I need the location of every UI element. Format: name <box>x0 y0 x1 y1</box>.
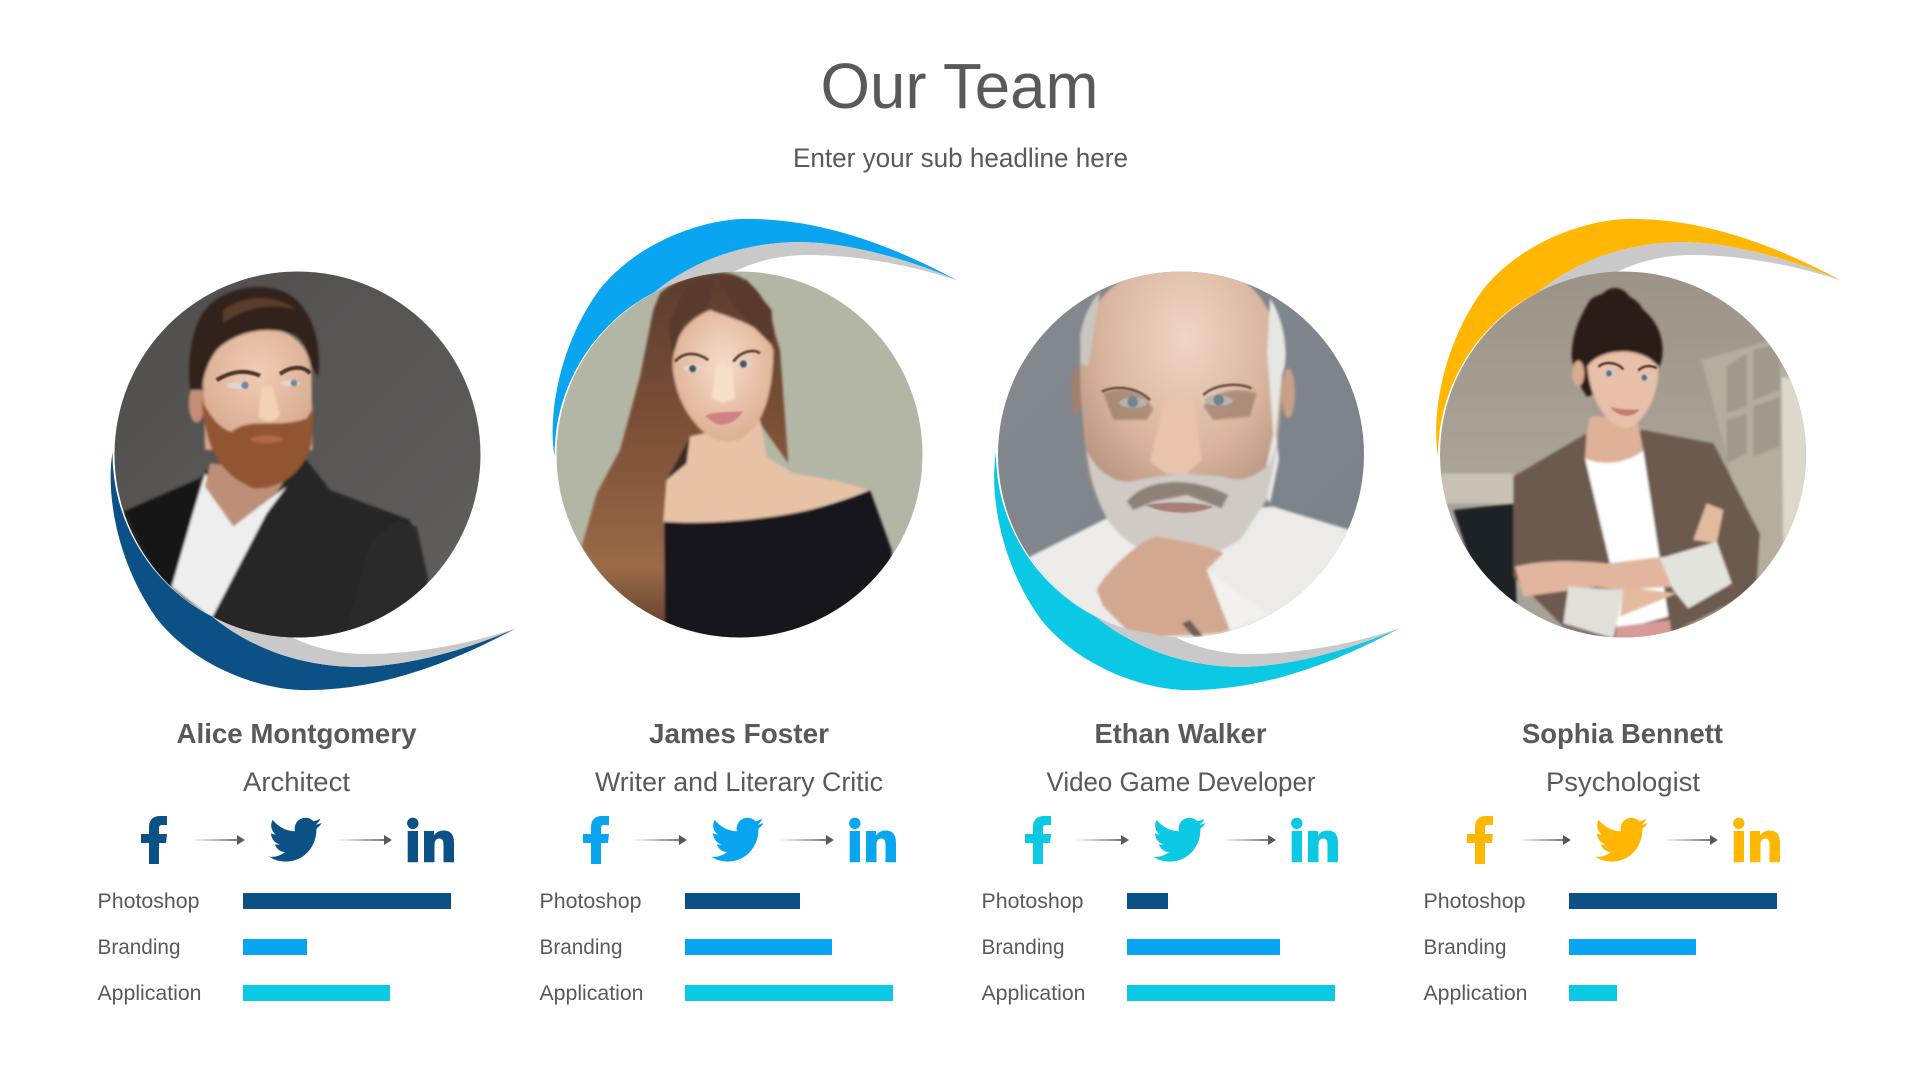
skill label: Branding <box>1424 936 1506 959</box>
swoosh: amber and grey <box>1436 219 1842 456</box>
panel: James Foster <box>540 218 958 1004</box>
skill label: Photoshop <box>1424 890 1526 913</box>
icon: facebook <box>141 816 167 864</box>
skill bar <box>1569 939 1696 955</box>
name: Alice Montgomery <box>176 718 417 749</box>
social icons row <box>583 816 896 864</box>
swoosh: cyan and grey <box>994 452 1400 690</box>
skill bar <box>1127 985 1335 1001</box>
portrait photo: bearded man in dark suit <box>114 272 480 638</box>
skill bar <box>243 939 307 955</box>
skill label: Application <box>540 982 644 1005</box>
portrait photo: woman with long brown hair <box>556 272 922 638</box>
skill label: Photoshop <box>982 890 1084 913</box>
swoosh: navy and grey <box>111 452 516 690</box>
panel: Sophia Bennett <box>1424 218 1842 1004</box>
name: Sophia Bennett <box>1522 718 1723 749</box>
icon: linkedin <box>849 818 896 862</box>
icon: twitter <box>269 818 322 862</box>
panel: Ethan Walker <box>982 272 1400 1004</box>
arrow <box>1663 835 1718 845</box>
name: Ethan Walker <box>1094 718 1267 749</box>
social icons row <box>1467 816 1780 864</box>
role: Video Game Developer <box>1046 767 1316 797</box>
social icons row <box>1025 816 1338 864</box>
skill chart <box>540 890 893 1005</box>
skill label: Photoshop <box>540 890 642 913</box>
icon: twitter <box>711 818 764 862</box>
swoosh: blue and grey <box>553 219 958 456</box>
icon: linkedin <box>1291 818 1338 862</box>
arrow <box>1517 835 1571 845</box>
skill bar <box>685 893 800 909</box>
panel: Alice Montgomery <box>98 272 516 1004</box>
skill label: Application <box>1424 982 1528 1005</box>
arrow <box>1221 835 1276 845</box>
role: Writer and Literary Critic <box>595 767 883 797</box>
skill bar <box>1569 985 1617 1001</box>
skill label: Application <box>982 982 1086 1005</box>
social icons row <box>141 816 454 864</box>
portrait photo: older bald man with grey beard <box>998 272 1364 638</box>
role: Architect <box>243 767 351 797</box>
icon: facebook <box>1467 816 1493 864</box>
skill bar <box>1569 893 1777 909</box>
skill bar <box>685 985 893 1001</box>
skill bar <box>243 893 451 909</box>
skill chart <box>98 890 451 1005</box>
subtitle: Enter your sub headline here <box>793 143 1128 173</box>
arrow <box>337 835 392 845</box>
icon: twitter <box>1153 818 1206 862</box>
skill label: Photoshop <box>98 890 200 913</box>
icon: facebook <box>1025 816 1051 864</box>
skill label: Branding <box>98 936 180 959</box>
title: Our Team <box>820 50 1098 122</box>
skill label: Branding <box>540 936 622 959</box>
role: Psychologist <box>1546 767 1701 797</box>
name: James Foster <box>649 718 829 749</box>
arrow <box>1075 835 1129 845</box>
skill label: Branding <box>982 936 1064 959</box>
icon: facebook <box>583 816 609 864</box>
portrait photo: woman in tweed blazer <box>1440 272 1806 638</box>
skill label: Application <box>98 982 202 1005</box>
skill chart <box>982 890 1335 1005</box>
skill bar <box>243 985 390 1001</box>
arrow <box>633 835 687 845</box>
icon: linkedin <box>1733 818 1780 862</box>
arrow <box>779 835 834 845</box>
arrow <box>191 835 245 845</box>
icon: twitter <box>1595 818 1648 862</box>
skill bar <box>1127 893 1168 909</box>
skill chart <box>1424 890 1777 1005</box>
icon: linkedin <box>407 818 454 862</box>
skill bar <box>685 939 832 955</box>
skill bar <box>1127 939 1280 955</box>
